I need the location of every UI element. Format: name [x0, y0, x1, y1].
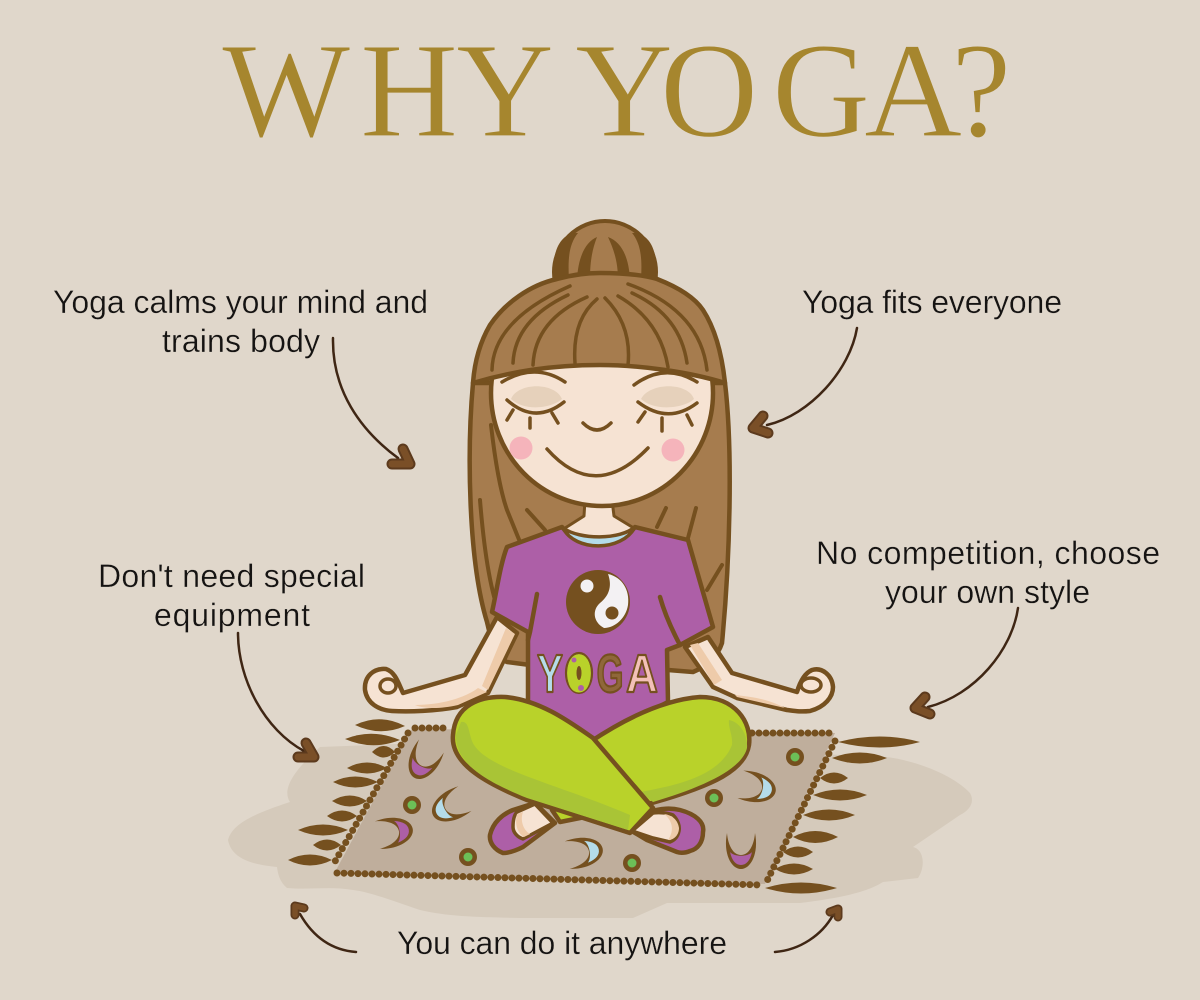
t-shirt	[492, 527, 713, 740]
rug left tassels	[288, 719, 405, 866]
hair fringe	[473, 273, 725, 383]
rug moon blue	[426, 785, 472, 829]
arrow: fits everyone	[753, 328, 857, 433]
rug dots	[403, 748, 804, 872]
arrow: anywhere left	[295, 906, 356, 952]
callout: no competition: No competition, choose	[816, 535, 1160, 571]
right arm	[685, 637, 833, 711]
arrow: anywhere right	[775, 909, 838, 952]
rug moon purple right	[726, 833, 756, 869]
eyes and lashes	[502, 372, 697, 431]
shirt collar	[563, 527, 635, 546]
left foot	[490, 803, 555, 853]
left leg	[453, 697, 653, 833]
YOGA shirt lettering: Y	[537, 643, 563, 703]
rug base	[335, 729, 835, 884]
right leg	[552, 697, 749, 822]
callout: no equipment	[98, 558, 365, 633]
shirt fold lines	[528, 594, 680, 645]
right foot	[630, 809, 703, 853]
nose and mouth	[547, 423, 648, 476]
rug right tassels	[765, 736, 920, 894]
callout: no equipment: equipment	[154, 597, 310, 633]
yin yang symbol	[566, 570, 630, 634]
YOGA shirt lettering: O	[566, 643, 592, 704]
arrow: calms mind	[333, 338, 410, 464]
rug moon blue centre	[565, 834, 605, 870]
hair back	[470, 383, 730, 672]
left arm	[365, 617, 517, 711]
callout: fits everyone: Yoga fits everyone	[802, 284, 1062, 320]
title: WHY YOGA?	[222, 16, 1011, 166]
neck	[562, 500, 637, 550]
YOGA shirt lettering: G	[597, 643, 623, 704]
arrow: no equipment	[238, 633, 314, 757]
callout: calms mind: trains body	[162, 323, 320, 359]
arrow: no competition	[915, 608, 1018, 714]
YOGA shirt lettering	[537, 643, 658, 704]
girl figure	[365, 221, 833, 853]
rug moon blue right	[737, 770, 779, 806]
callout: no competition	[816, 535, 1160, 610]
callout: no competition: your own style	[885, 574, 1090, 610]
hair bun	[554, 221, 656, 323]
cheeks	[510, 436, 532, 460]
rug	[288, 719, 920, 894]
eyelids	[511, 386, 694, 407]
rug beaded edges	[333, 728, 835, 885]
callout: anywhere: You can do it anywhere	[397, 925, 727, 961]
YOGA shirt lettering: A	[626, 644, 658, 704]
face	[491, 280, 713, 506]
rug moon purple left	[375, 814, 415, 850]
floor shadow	[228, 740, 972, 918]
callout: no equipment: Don't need special	[98, 558, 365, 594]
callout: calms mind	[53, 284, 428, 359]
rug moon purple top left	[401, 739, 445, 785]
callout: calms mind: Yoga calms your mind and	[53, 284, 428, 320]
